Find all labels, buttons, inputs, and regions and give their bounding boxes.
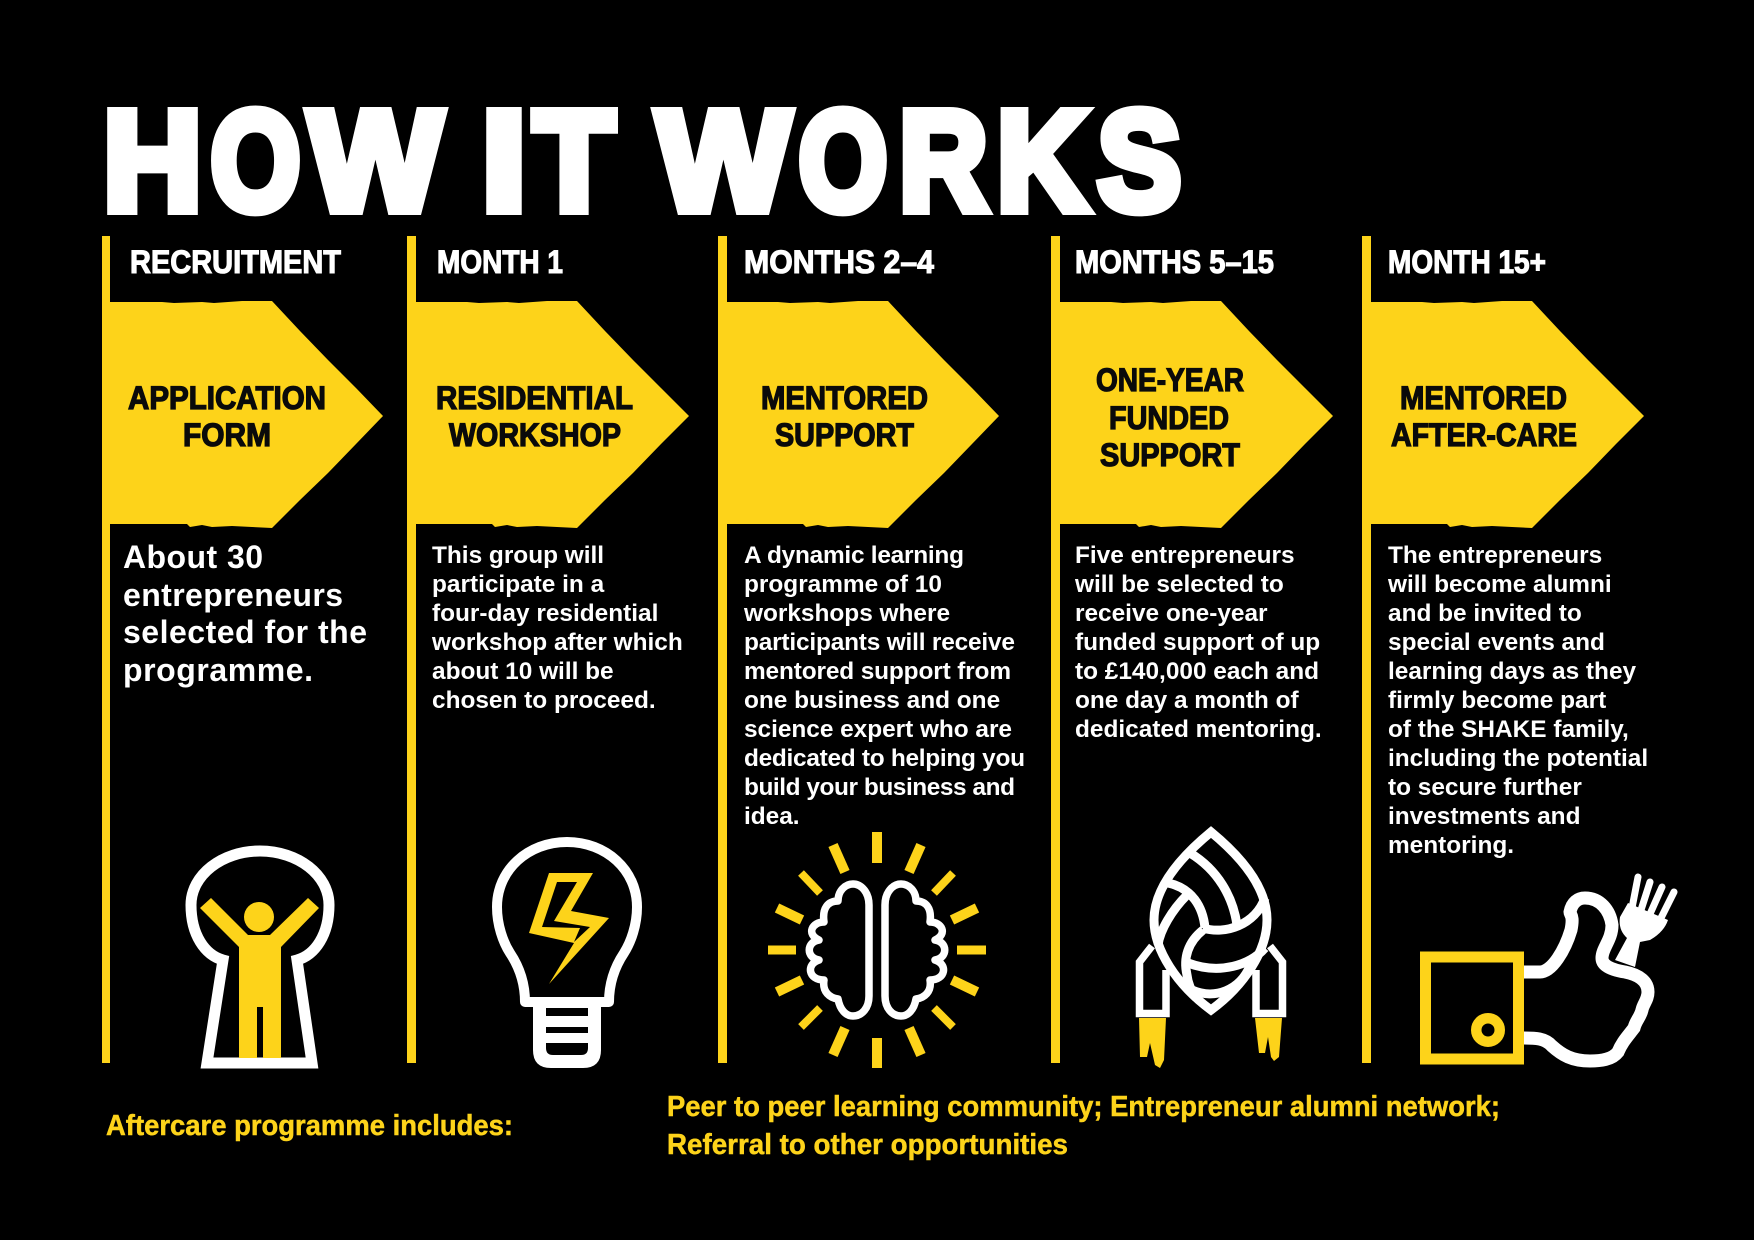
body text: months 5-15 [1074, 542, 1322, 743]
body text: months 5-15: will be selected to [1074, 571, 1284, 598]
panel: month 15+ [1362, 236, 1674, 1063]
body text: month 15+: will become alumni [1387, 571, 1612, 598]
icon: brain with rays [768, 832, 986, 1068]
body text: month 15+ [1387, 542, 1648, 859]
body text: month 15+: including the potential [1388, 745, 1648, 772]
arrow: residential workshop [407, 301, 689, 528]
body text: month 1: chosen to proceed. [432, 687, 656, 714]
panel: months 5-15 [1051, 236, 1333, 1068]
body text: months 5-15: Five entrepreneurs [1075, 542, 1295, 569]
arrow text: mentored support [761, 380, 928, 453]
arrow text: one-year funded support [1096, 362, 1244, 473]
column bar: month 1 [407, 236, 416, 1063]
title: H [103, 82, 202, 240]
body text: months 2-4: dedicated to helping you [744, 745, 1025, 772]
arrow: one-year funded support [1051, 301, 1333, 528]
body text: month 1 [431, 542, 683, 714]
body text: months 2-4: workshops where [743, 600, 950, 627]
body text: recruitment: selected for the [123, 614, 367, 650]
body text: month 15+: learning days as they [1388, 658, 1637, 685]
body text: recruitment: About 30 [123, 539, 263, 575]
body text: month 1: This group will [432, 542, 604, 569]
body text: months 2-4: idea. [744, 803, 800, 830]
period label: recruitment: RECRUITMENT [130, 244, 341, 280]
icon: person in keyhole [191, 851, 329, 1063]
title: I [482, 82, 526, 240]
icon: light bulb [497, 842, 637, 1068]
arrow text: residential workshop [436, 380, 633, 453]
body text: month 1: workshop after which [431, 629, 683, 656]
footer: aftercare list: Referral to other opportunities [667, 1129, 1068, 1161]
body text: month 15+: mentoring. [1388, 832, 1514, 859]
arrow text: mentored support: SUPPORT [775, 417, 914, 453]
title: R [899, 82, 988, 240]
body text: month 1: four-day residential [432, 600, 658, 627]
column bar: months 5-15 [1051, 236, 1060, 1063]
body text: month 15+: investments and [1388, 803, 1580, 830]
body text: month 15+: and be invited to [1388, 600, 1582, 627]
period label: months 5-15: MONTHS 5–15 [1075, 244, 1274, 280]
body text: month 15+: firmly become part [1388, 687, 1606, 714]
body text: month 1: participate in a [432, 571, 605, 598]
body text: months 2-4: science expert who are [744, 716, 1012, 743]
title: K [997, 82, 1088, 240]
title: T [534, 82, 614, 240]
arrow: mentored support [718, 301, 999, 528]
body text: month 15+: special events and [1388, 629, 1605, 656]
body text: months 2-4: A dynamic learning [744, 542, 964, 569]
body text: months 5-15: funded support of up [1075, 629, 1320, 656]
body text: months 5-15: dedicated mentoring. [1075, 716, 1322, 743]
body text: recruitment [123, 539, 367, 688]
arrow text: one-year funded support: FUNDED [1109, 400, 1229, 436]
title: O [799, 82, 887, 240]
title: O [211, 82, 300, 240]
body text: month 15+: The entrepreneurs [1388, 542, 1602, 569]
arrow: mentored after-care [1362, 301, 1644, 528]
footer: aftercare list [667, 1091, 1500, 1161]
arrow: application form [102, 301, 383, 528]
body text: months 2-4 [743, 542, 1025, 830]
title: W [657, 82, 790, 240]
icon: rocket [1139, 832, 1282, 1068]
period label: month 15+: MONTH 15+ [1388, 244, 1546, 280]
title: S [1098, 82, 1181, 240]
arrow text: application form: FORM [183, 417, 271, 453]
body text: months 5-15: to £140,000 each and [1075, 658, 1319, 685]
arrow text: residential workshop: WORKSHOP [449, 417, 621, 453]
period label: months 2-4: MONTHS 2–4 [744, 244, 934, 280]
body text: months 5-15: one day a month of [1075, 687, 1299, 714]
panel: months 2-4 [718, 236, 1025, 1068]
body text: recruitment: programme. [123, 652, 313, 688]
body text: months 2-4: programme of 10 [744, 571, 942, 598]
arrow text: mentored after-care [1391, 380, 1577, 453]
footer: aftercare list: Peer to peer learning community; Entrepreneur alumni network; [667, 1091, 1500, 1123]
body text: months 2-4: one business and one [744, 687, 1000, 714]
panel: recruitment [102, 236, 383, 1063]
body text: month 15+: to secure further [1388, 774, 1582, 801]
panel: month 1 [407, 236, 689, 1068]
arrow text: mentored after-care: AFTER-CARE [1391, 417, 1577, 453]
arrow text: residential workshop: RESIDENTIAL [436, 380, 633, 416]
arrow text: one-year funded support: ONE-YEAR [1096, 362, 1244, 398]
icon: thumbs up with fork [1426, 877, 1674, 1061]
arrow text: mentored support: MENTORED [761, 380, 928, 416]
body text: months 2-4: build your business and [744, 774, 1015, 801]
period label: month 1: MONTH 1 [437, 244, 563, 280]
body text: recruitment: entrepreneurs [123, 577, 343, 613]
column bar: months 2-4 [718, 236, 727, 1063]
column bar: recruitment [102, 236, 110, 1063]
body text: months 5-15: receive one-year [1075, 600, 1268, 627]
footer: aftercare heading: Aftercare programme includes: [106, 1110, 513, 1142]
body text: month 1: about 10 will be [432, 658, 614, 685]
body text: months 2-4: mentored support from [744, 658, 1011, 685]
title: W [309, 82, 442, 240]
body text: month 15+: of the SHAKE family, [1388, 716, 1629, 743]
arrow text: application form: APPLICATION [128, 380, 326, 416]
arrow text: one-year funded support: SUPPORT [1100, 437, 1240, 473]
body text: months 2-4: participants will receive [744, 629, 1015, 656]
column bar: month 15+ [1362, 236, 1371, 1063]
arrow text: application form [128, 380, 326, 453]
arrow text: mentored after-care: MENTORED [1400, 380, 1567, 416]
